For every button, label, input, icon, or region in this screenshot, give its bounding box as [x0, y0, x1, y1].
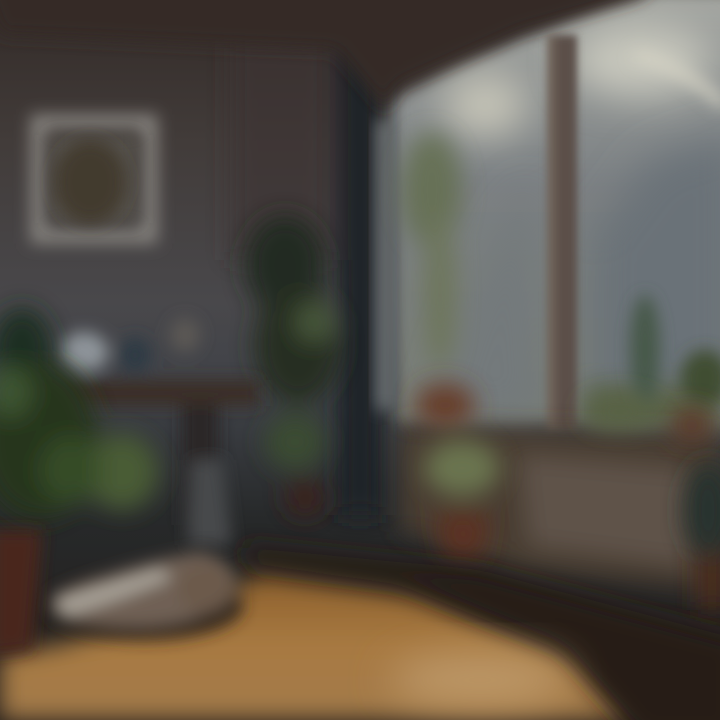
left foreground plant — [0, 308, 158, 520]
side table with objects — [60, 318, 260, 545]
right foreground plant — [684, 462, 720, 610]
terracotta pots and flowers on sill — [415, 383, 714, 558]
wooden floor — [0, 545, 720, 720]
left terracotta pot — [0, 530, 42, 655]
window mullion — [547, 35, 577, 430]
window view with mountains — [388, 0, 720, 430]
central indoor plant — [245, 215, 342, 516]
dark column beside window — [230, 25, 382, 515]
wall art frame — [38, 122, 150, 236]
lower wall under window — [400, 425, 720, 590]
small plant on right sill — [630, 295, 720, 406]
ceiling — [0, 0, 660, 110]
pale window reveal — [376, 120, 394, 410]
resting cat on rug — [47, 552, 243, 640]
window plant — [402, 132, 462, 370]
